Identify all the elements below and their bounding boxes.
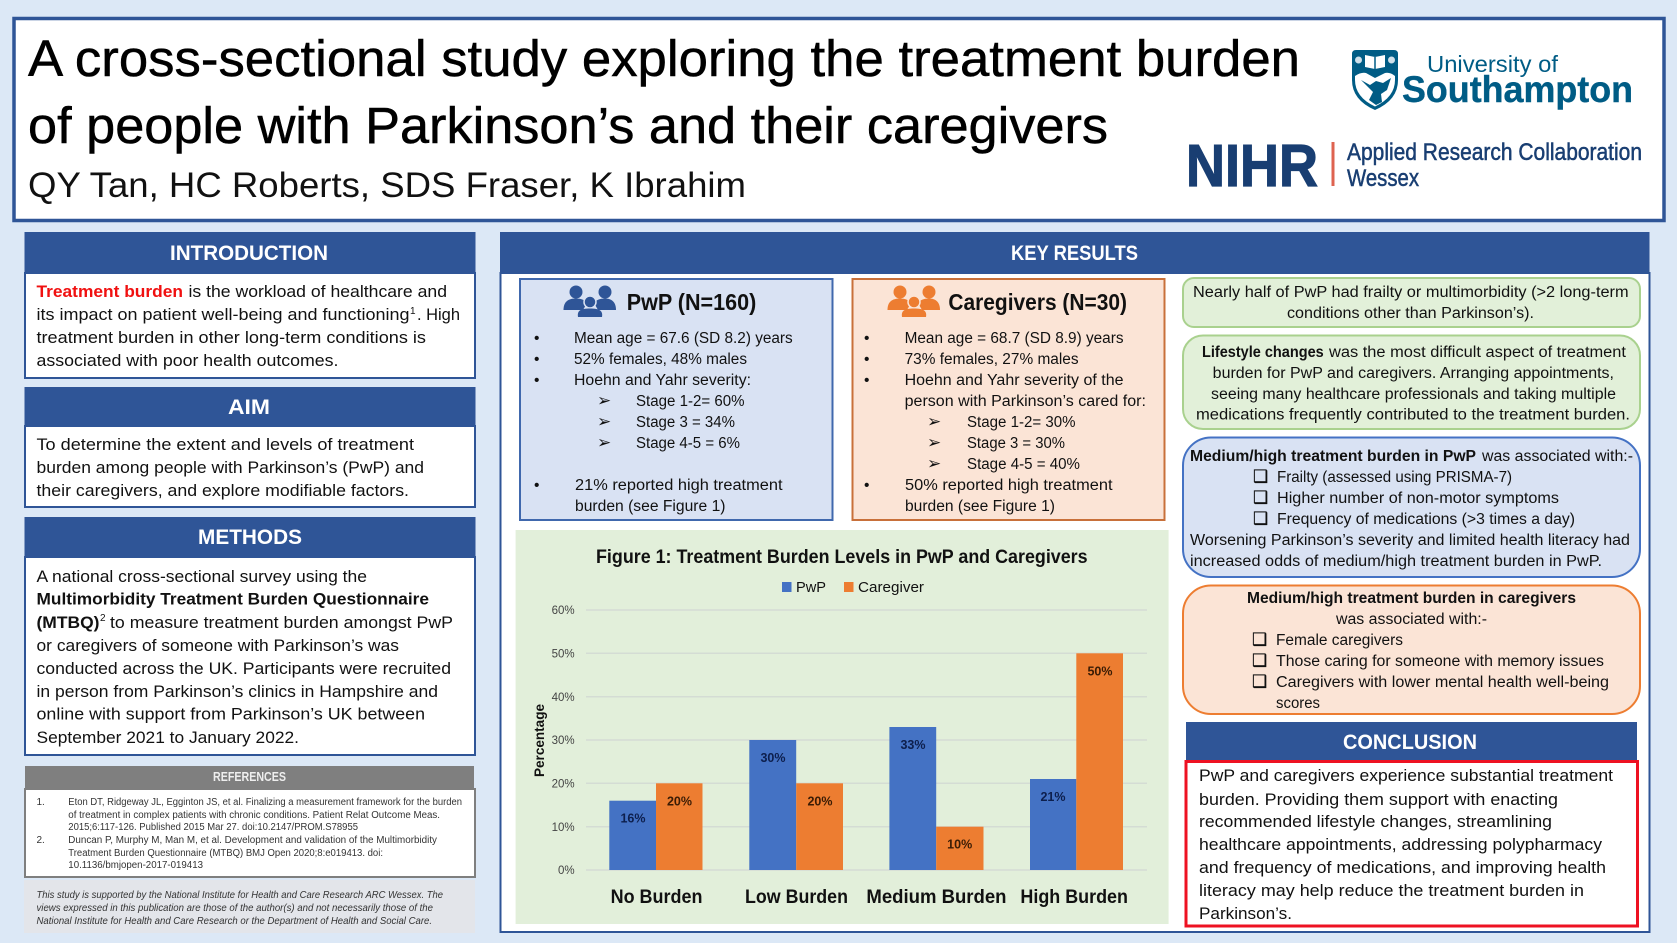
callout: lifestyle changes: medications frequently contributed to the treatment burden. xyxy=(1196,406,1630,424)
text: methods body: 2 xyxy=(100,613,106,624)
callout: burden factors in caregivers: Female caregivers xyxy=(1276,632,1403,649)
callout: burden factors in caregivers: ❑ xyxy=(1252,630,1267,650)
callout: lifestyle changes xyxy=(1183,336,1640,429)
text: introduction body xyxy=(36,282,460,370)
value labels: 20% xyxy=(807,794,833,808)
y axis labels: 50% xyxy=(552,648,575,660)
list: PwP demographics: ➢ xyxy=(597,391,611,411)
text: reference list: Treatment Burden Questionnaire (MTBQ) BMJ Open 2020;8:e019413. doi: xyxy=(68,848,383,859)
panel: key results xyxy=(500,232,1650,932)
callout: burden factors in PwP: increased odds of medium/high treatment burden in PwP. xyxy=(1190,553,1602,570)
callout: burden factors in caregivers: ❑ xyxy=(1252,651,1267,671)
bars: PwP xyxy=(609,727,1076,870)
list: caregiver demographics: • xyxy=(864,351,869,368)
text: methods body: (MTBQ) xyxy=(36,613,100,632)
callout: burden factors in caregivers: Caregivers with lower mental health well-being xyxy=(1276,674,1609,691)
panel: aim xyxy=(24,387,476,507)
y axis labels: 10% xyxy=(552,822,575,834)
list: PwP demographics: Stage 4-5 = 6% xyxy=(636,435,740,452)
callout: burden factors in PwP: Worsening Parkinson’s severity and limited health literacy had xyxy=(1190,532,1630,549)
legend: PwP xyxy=(796,579,826,596)
list: PwP demographics: Mean age = 67.6 (SD 8.2) years xyxy=(574,330,793,347)
text: conclusion body: PwP and caregivers experience substantial treatment xyxy=(1199,766,1613,785)
callout: burden factors in PwP: Frailty (assessed using PRISMA-7) xyxy=(1277,469,1512,486)
text: methods body: A national cross-sectional survey using the xyxy=(36,567,367,586)
y axis labels: 20% xyxy=(552,778,575,790)
callout: frailty and multimorbidity xyxy=(1183,278,1640,327)
heading: PwP: PwP (N=160) xyxy=(627,289,756,315)
text: reference list: 10.1136/bmjopen-2017-019413 xyxy=(68,860,203,871)
callout: burden factors in PwP: was associated with:- xyxy=(1481,448,1633,465)
y axis labels: 30% xyxy=(552,735,575,747)
list: caregiver demographics: • xyxy=(864,372,869,389)
panel: introduction xyxy=(24,232,476,378)
text: introduction body: its impact on patient well-being and functioning xyxy=(36,305,410,324)
logo: NIHR Applied Research Collaboration Wessex: NIHR xyxy=(1186,133,1318,199)
text: methods body: September 2021 to January 2022. xyxy=(36,728,299,747)
list: caregiver demographics: Hoehn and Yahr severity of the xyxy=(905,372,1124,389)
text: reference list: Eton DT, Ridgeway JL, Egginton JS, et al. Finalizing a measurement framework for the burden xyxy=(68,797,462,808)
list: PwP demographics: Stage 1-2= 60% xyxy=(636,393,745,410)
text: aim body: burden among people with Parkinson’s (PwP) and xyxy=(36,458,424,477)
callout: burden factors in caregivers: was associated with:- xyxy=(1335,611,1487,628)
logo: NIHR Applied Research Collaboration Wessex xyxy=(1186,133,1642,199)
logo: University of Southampton xyxy=(1352,50,1633,110)
callout: burden factors in caregivers xyxy=(1183,586,1640,714)
text: methods body: or caregivers of someone with Parkinson’s was xyxy=(36,636,399,655)
list: caregiver demographics: • xyxy=(864,477,869,494)
list: PwP demographics: ➢ xyxy=(597,412,611,432)
list: PwP demographics: Hoehn and Yahr severity: xyxy=(574,372,751,389)
icon: people blue xyxy=(564,286,616,317)
panel: references xyxy=(25,766,475,877)
heading: references: REFERENCES xyxy=(213,770,286,784)
callout: frailty and multimorbidity: Nearly half of PwP had frailty or multimorbidity (>2 long-term xyxy=(1193,284,1629,301)
text: methods body: to measure treatment burden amongst PwP xyxy=(110,613,453,632)
panel: conclusion xyxy=(1186,722,1638,926)
text: aim body: To determine the extent and levels of treatment xyxy=(36,435,414,454)
category labels: Low Burden xyxy=(745,887,848,908)
callout: lifestyle changes: seeing many healthcare professionals and taking multiple xyxy=(1211,386,1616,403)
text: reference list: of treatment in complex patients with chronic conditions. Patient Relat Outcome Meas. xyxy=(68,810,440,821)
callout: burden factors in PwP: Frequency of medications (>3 times a day) xyxy=(1277,511,1575,528)
title: A cross-sectional study exploring the treatment burden xyxy=(28,30,1300,87)
logo: NIHR Applied Research Collaboration Wessex: Wessex xyxy=(1347,165,1419,192)
text: conclusion body: and frequency of medications, and improving health xyxy=(1199,858,1606,877)
funding acknowledgement: This study is supported by the National Institute for Health and Care Research ARC Wessex. The xyxy=(36,889,443,901)
heading: caregivers: Caregivers (N=30) xyxy=(948,289,1127,315)
list: PwP demographics: ➢ xyxy=(597,433,611,453)
text: conclusion body: recommended lifestyle changes, streamlining xyxy=(1199,812,1552,831)
list: caregiver demographics: ➢ xyxy=(927,433,941,453)
callout: burden factors in PwP xyxy=(1183,438,1640,577)
value labels: 21% xyxy=(1040,790,1066,804)
legend xyxy=(782,579,924,596)
category labels: High Burden xyxy=(1020,887,1128,908)
value labels: 16% xyxy=(620,812,646,826)
text: reference list xyxy=(36,797,462,871)
text: methods body: online with support from Parkinson’s UK between xyxy=(36,704,425,724)
callout: burden factors in caregivers: scores xyxy=(1276,695,1320,712)
logo: University of Southampton: University of xyxy=(1427,51,1559,77)
value labels: 10% xyxy=(947,838,972,852)
value labels xyxy=(620,664,1113,852)
list: PwP demographics xyxy=(534,330,793,515)
funding acknowledgement: National Institute for Health and Care Research or the Department of Health and Social Care. xyxy=(36,915,432,927)
heading: aim: AIM xyxy=(228,396,270,419)
callout: burden factors in caregivers: Those caring for someone with memory issues xyxy=(1276,653,1604,670)
chart: treatment burden levels xyxy=(516,530,1169,924)
heading: conclusion: CONCLUSION xyxy=(1343,731,1477,754)
text: methods body: Multimorbidity Treatment Burden Questionnaire xyxy=(36,590,429,608)
value labels: 50% xyxy=(1087,664,1113,678)
list: PwP demographics: • xyxy=(534,372,539,389)
list: caregiver demographics: Stage 4-5 = 40% xyxy=(967,456,1080,473)
list: PwP demographics: • xyxy=(534,351,539,368)
list: caregiver demographics: 73% females, 27% males xyxy=(905,351,1079,368)
category labels: Medium Burden xyxy=(866,887,1006,908)
list: PwP demographics: Stage 3 = 34% xyxy=(636,414,735,431)
heading: introduction: INTRODUCTION xyxy=(170,242,328,265)
callout: lifestyle changes: was the most difficult aspect of treatment xyxy=(1328,344,1627,361)
text: conclusion body: literacy may help reduce the treatment burden in xyxy=(1199,881,1584,900)
y axis labels: 60% xyxy=(552,605,575,617)
list: caregiver demographics: Mean age = 68.7 (SD 8.9) years xyxy=(905,330,1124,347)
logo: NIHR Applied Research Collaboration Wessex: Applied Research Collaboration xyxy=(1347,139,1642,166)
text: conclusion body: burden. Providing them support with enacting xyxy=(1199,790,1558,809)
text: introduction body: 1 xyxy=(410,306,416,317)
text: introduction body: associated with poor health outcomes. xyxy=(36,351,338,370)
list: caregiver demographics: ➢ xyxy=(927,412,941,432)
y axis title: Percentage xyxy=(532,704,547,777)
text: methods body xyxy=(36,567,453,747)
text: reference list: 2. xyxy=(36,835,45,846)
heading: methods: METHODS xyxy=(198,526,302,549)
list: PwP demographics: 52% females, 48% males xyxy=(574,351,747,368)
list: PwP demographics: • xyxy=(534,330,539,347)
list: caregiver demographics: 50% reported high treatment xyxy=(905,477,1113,494)
value labels: 30% xyxy=(760,751,786,765)
text: aim body xyxy=(36,435,424,500)
callout: burden factors in PwP: Higher number of non-motor symptoms xyxy=(1277,490,1559,507)
y axis labels: 40% xyxy=(552,692,575,704)
callout: burden factors in PwP: ❑ xyxy=(1253,467,1268,487)
text: introduction body: treatment burden in other long-term conditions is xyxy=(36,328,426,347)
text: conclusion body: Parkinson’s. xyxy=(1199,904,1292,923)
callout: lifestyle changes: Lifestyle changes xyxy=(1202,344,1324,361)
list: PwP demographics: burden (see Figure 1) xyxy=(575,498,726,515)
callout: burden factors in PwP: ❑ xyxy=(1253,509,1268,529)
y axis labels xyxy=(552,605,575,877)
text: reference list: Duncan P, Murphy M, Man M, et al. Development and validation of the Multimorbidity xyxy=(68,835,437,846)
list: caregiver demographics: person with Parkinson’s cared for: xyxy=(905,393,1146,410)
callout: burden factors in PwP: ❑ xyxy=(1253,488,1268,508)
callout: burden factors in caregivers: ❑ xyxy=(1252,672,1267,692)
list: PwP demographics: • xyxy=(534,477,539,494)
list: caregiver demographics: ➢ xyxy=(927,454,941,474)
title xyxy=(28,30,1300,154)
category labels xyxy=(611,887,1128,908)
list: caregiver demographics: Stage 1-2= 30% xyxy=(967,414,1076,431)
callout: frailty and multimorbidity: conditions other than Parkinson’s). xyxy=(1287,305,1534,322)
funding acknowledgement xyxy=(24,880,475,933)
callout: burden factors in caregivers: Medium/high treatment burden in caregivers xyxy=(1247,590,1576,607)
funding acknowledgement: views expressed in this publication are those of the author(s) and not necessarily those of the xyxy=(36,902,433,914)
text: methods body: conducted across the UK. Participants were recruited xyxy=(36,659,451,678)
text: introduction body: is the workload of healthcare and xyxy=(188,282,447,301)
callout: burden factors in PwP: Medium/high treatment burden in PwP xyxy=(1190,448,1476,465)
text: aim body: their caregivers, and explore modifiable factors. xyxy=(36,481,409,500)
logo: University of Southampton: Southampton xyxy=(1402,69,1633,110)
text: introduction body: Treatment burden xyxy=(36,282,183,301)
list: caregiver demographics: burden (see Figure 1) xyxy=(905,498,1055,515)
text: introduction body: . High xyxy=(417,305,460,324)
icon: people orange xyxy=(888,286,940,317)
text: conclusion body xyxy=(1199,766,1613,923)
chart title: Figure 1: Treatment Burden Levels in PwP and Caregivers xyxy=(596,547,1088,568)
legend: Caregiver xyxy=(858,579,924,596)
title: of people with Parkinson’s and their caregivers xyxy=(28,97,1108,154)
panel: caregiver characteristics xyxy=(852,279,1164,520)
category labels: No Burden xyxy=(611,887,702,908)
panel: PwP characteristics xyxy=(520,279,832,520)
text: conclusion body: healthcare appointments, addressing polypharmacy xyxy=(1199,835,1603,854)
text: methods body: in person from Parkinson’s clinics in Hampshire and xyxy=(36,682,438,701)
heading: key results: KEY RESULTS xyxy=(1011,242,1138,265)
callout: lifestyle changes: burden for PwP and caregivers. Arranging appointments, xyxy=(1213,365,1614,382)
list: caregiver demographics: • xyxy=(864,330,869,347)
authors: QY Tan, HC Roberts, SDS Fraser, K Ibrahim xyxy=(28,166,746,205)
list: caregiver demographics: Stage 3 = 30% xyxy=(967,435,1065,452)
bars: caregiver xyxy=(656,653,1123,870)
text: reference list: 1. xyxy=(36,797,45,808)
header banner xyxy=(14,18,1664,220)
list: caregiver demographics xyxy=(864,330,1146,515)
list: PwP demographics: 21% reported high treatment xyxy=(575,477,783,494)
panel: methods xyxy=(24,517,476,755)
value labels: 33% xyxy=(900,738,926,752)
text: reference list: 2015;6:117-126. Published 2015 Mar 27. doi:10.2147/PROM.S78955 xyxy=(68,822,358,833)
y axis labels: 0% xyxy=(558,865,575,877)
value labels: 20% xyxy=(667,794,692,808)
